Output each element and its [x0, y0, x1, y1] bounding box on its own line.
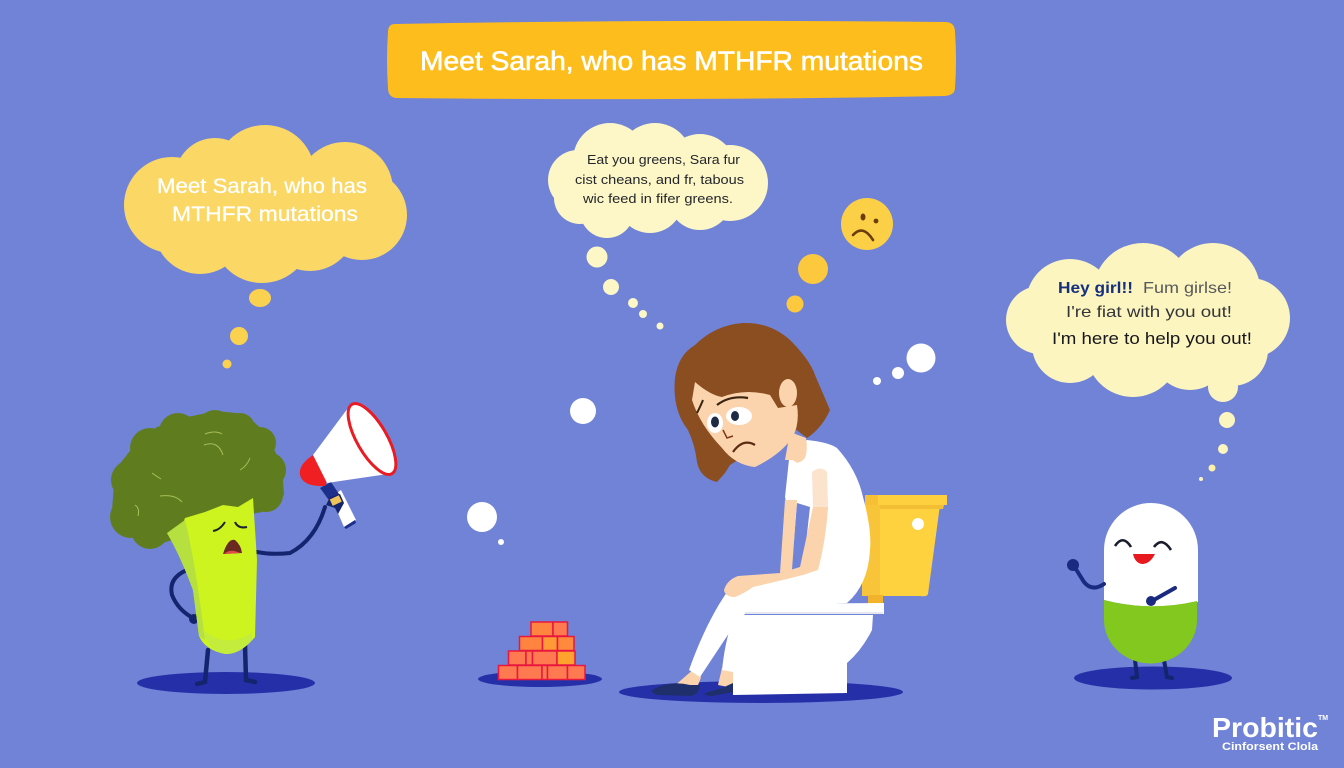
thought cloud: probiotic greeting: I'm here to help you out! — [1052, 329, 1252, 348]
thought cloud: intro — [124, 125, 407, 368]
broccoli stalk — [167, 498, 257, 654]
thought cloud: intro: MTHFR mutations — [172, 203, 358, 226]
Sarah neck — [785, 432, 807, 463]
toilet tank — [862, 505, 940, 596]
ground shadows — [137, 666, 1232, 703]
broccoli legs — [197, 645, 255, 684]
pill face — [1115, 540, 1171, 564]
thought cloud: eat your greens: Eat you greens, Sara fur — [587, 152, 741, 167]
thought cloud: probiotic greeting: I're fiat with you out! — [1066, 304, 1232, 321]
Sarah face — [692, 382, 798, 467]
broccoli arms — [171, 507, 325, 618]
logo: Probitic: Cinforsent Clola — [1222, 741, 1319, 753]
broccoli left hand — [189, 614, 199, 624]
megaphone — [300, 397, 405, 529]
logo: Probitic — [1212, 712, 1328, 753]
icon: sad face emoji with thought dots — [786, 198, 893, 312]
broccoli face — [213, 522, 247, 554]
pill body — [1104, 503, 1198, 607]
Sarah torso gap — [792, 503, 810, 570]
logo: Probitic: Probitic — [1212, 712, 1318, 743]
title banner: Meet Sarah, who has MTHFR mutations — [420, 46, 923, 76]
pill arms — [1074, 566, 1175, 601]
Sarah arms and hand — [724, 468, 828, 597]
thought cloud: probiotic greeting: Hey girl!! — [1058, 280, 1133, 297]
thought cloud: intro: Meet Sarah, who has — [157, 175, 367, 198]
Sarah hair — [675, 323, 830, 482]
toilet seat — [743, 603, 884, 614]
Sarah facial features — [697, 397, 755, 452]
white thought dots — [467, 344, 936, 545]
character: Sarah sitting sadly — [652, 323, 870, 696]
title banner — [387, 21, 956, 99]
character: broccoli with megaphone — [110, 397, 405, 684]
thought cloud: eat your greens: wic feed in fifer greens. — [582, 191, 733, 206]
broccoli floret head — [110, 410, 286, 549]
character: happy probiotic pill — [1067, 503, 1198, 678]
thought cloud: eat your greens — [548, 123, 768, 330]
Sarah trousers and torso — [689, 440, 870, 677]
logo: Probitic: TM — [1318, 715, 1328, 722]
Sarah shoes and feet — [652, 668, 733, 696]
thought cloud: probiotic greeting — [1006, 243, 1290, 481]
thought cloud: probiotic greeting: Fum girlse! — [1143, 280, 1232, 297]
thought cloud: eat your greens: cist cheans, and fr, tabous — [575, 172, 745, 187]
brick pile — [498, 622, 585, 680]
toilet bowl — [733, 615, 873, 695]
toilet — [733, 495, 947, 695]
pill legs — [1132, 660, 1172, 678]
